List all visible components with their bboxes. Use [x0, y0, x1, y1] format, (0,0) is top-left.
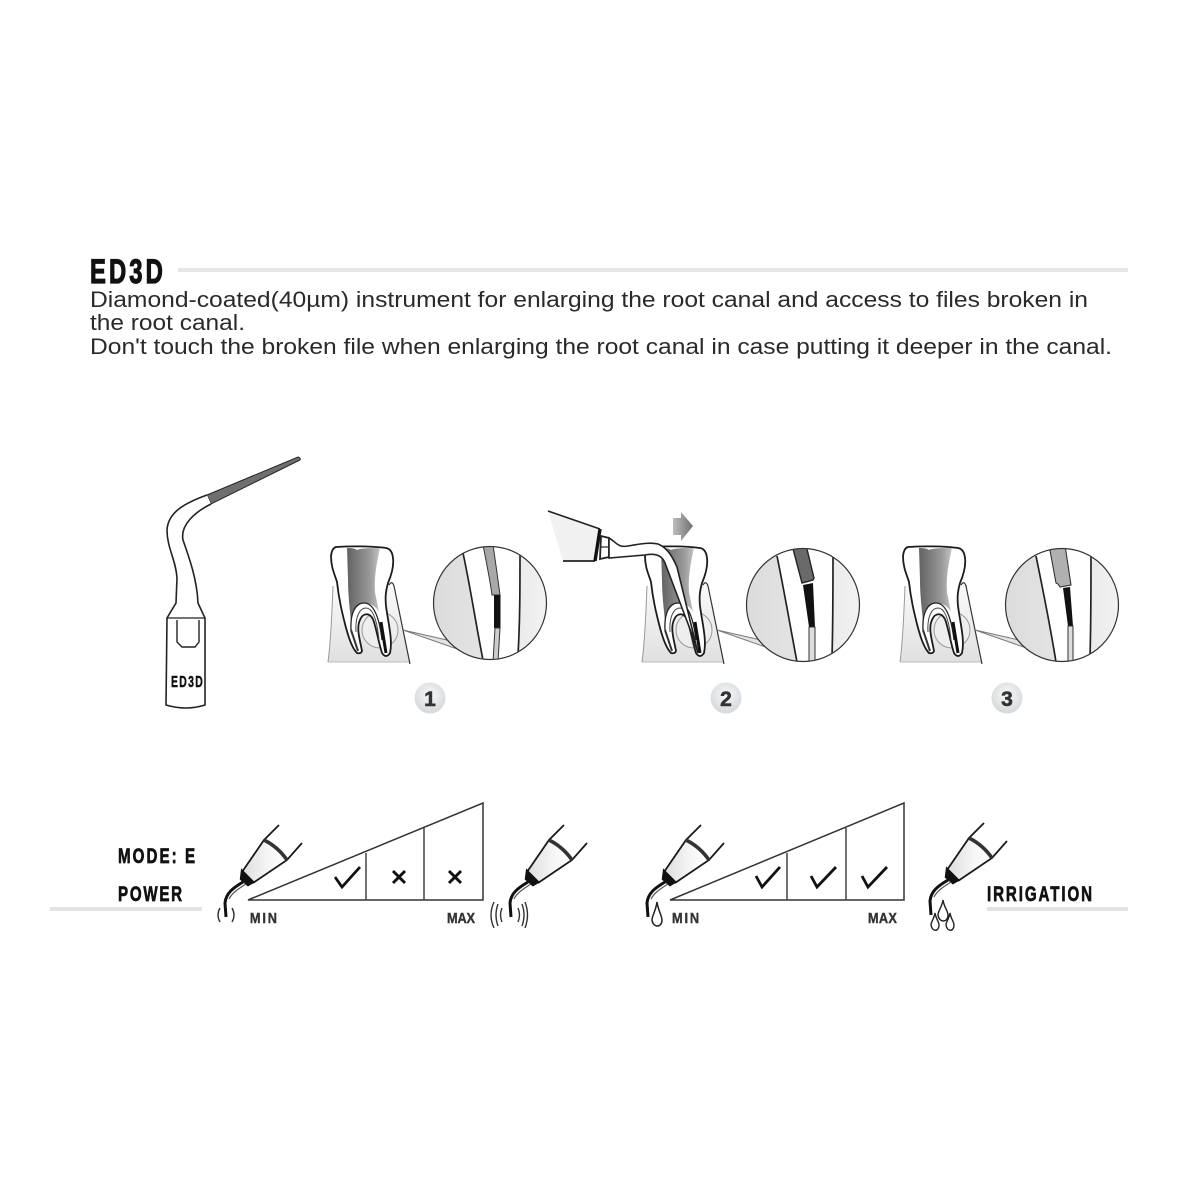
step number 3: 3: [1001, 688, 1013, 711]
step number 3: [992, 682, 1022, 714]
description text: Don't touch the broken file when enlarging the root canal in case putting it deeper in the canal.: [90, 334, 1112, 359]
icon: ED3D instrument tip: ED3D: [171, 673, 203, 691]
chart: power scale: [248, 803, 483, 926]
magnified lens 3: [1006, 545, 1118, 664]
icon: ED3D instrument tip: [166, 457, 300, 708]
step number 1: [414, 682, 446, 714]
arrow: [673, 512, 693, 541]
chart: power scale: MIN: [250, 909, 277, 926]
panel: step 1 tooth: [328, 545, 546, 664]
icon: handpiece high irrigation: [930, 823, 1007, 930]
handpiece: [548, 511, 698, 653]
panel: step 3 tooth: [900, 545, 1118, 664]
mode and power labels: MODE: E: [118, 843, 195, 868]
step number 1: 1: [424, 688, 436, 711]
chart: power scale: MAX: [447, 909, 476, 926]
magnified lens 1: [434, 545, 546, 662]
title: ED3D: [90, 253, 163, 291]
step number 2: [710, 682, 742, 714]
panel: step 2 tooth with handpiece: [548, 511, 860, 664]
irrigation label: IRRIGATION: [987, 881, 1092, 906]
magnified lens 2: [746, 545, 860, 664]
step number 2: 2: [720, 688, 732, 711]
description text: Diamond-coated(40µm) instrument for enlarging the root canal and access to files broken in: [90, 287, 1088, 312]
icon: handpiece low irrigation: [647, 825, 724, 926]
mode and power labels: [118, 843, 195, 906]
description text: the root canal.: [90, 310, 245, 335]
mode and power labels: POWER: [118, 881, 182, 906]
chart: irrigation scale: MAX: [868, 909, 898, 926]
chart: irrigation scale: [670, 803, 904, 926]
description text: [90, 287, 1112, 359]
icon: handpiece low vibration: [218, 825, 302, 922]
icon: handpiece high vibration: [491, 825, 587, 928]
chart: irrigation scale: MIN: [672, 909, 699, 926]
